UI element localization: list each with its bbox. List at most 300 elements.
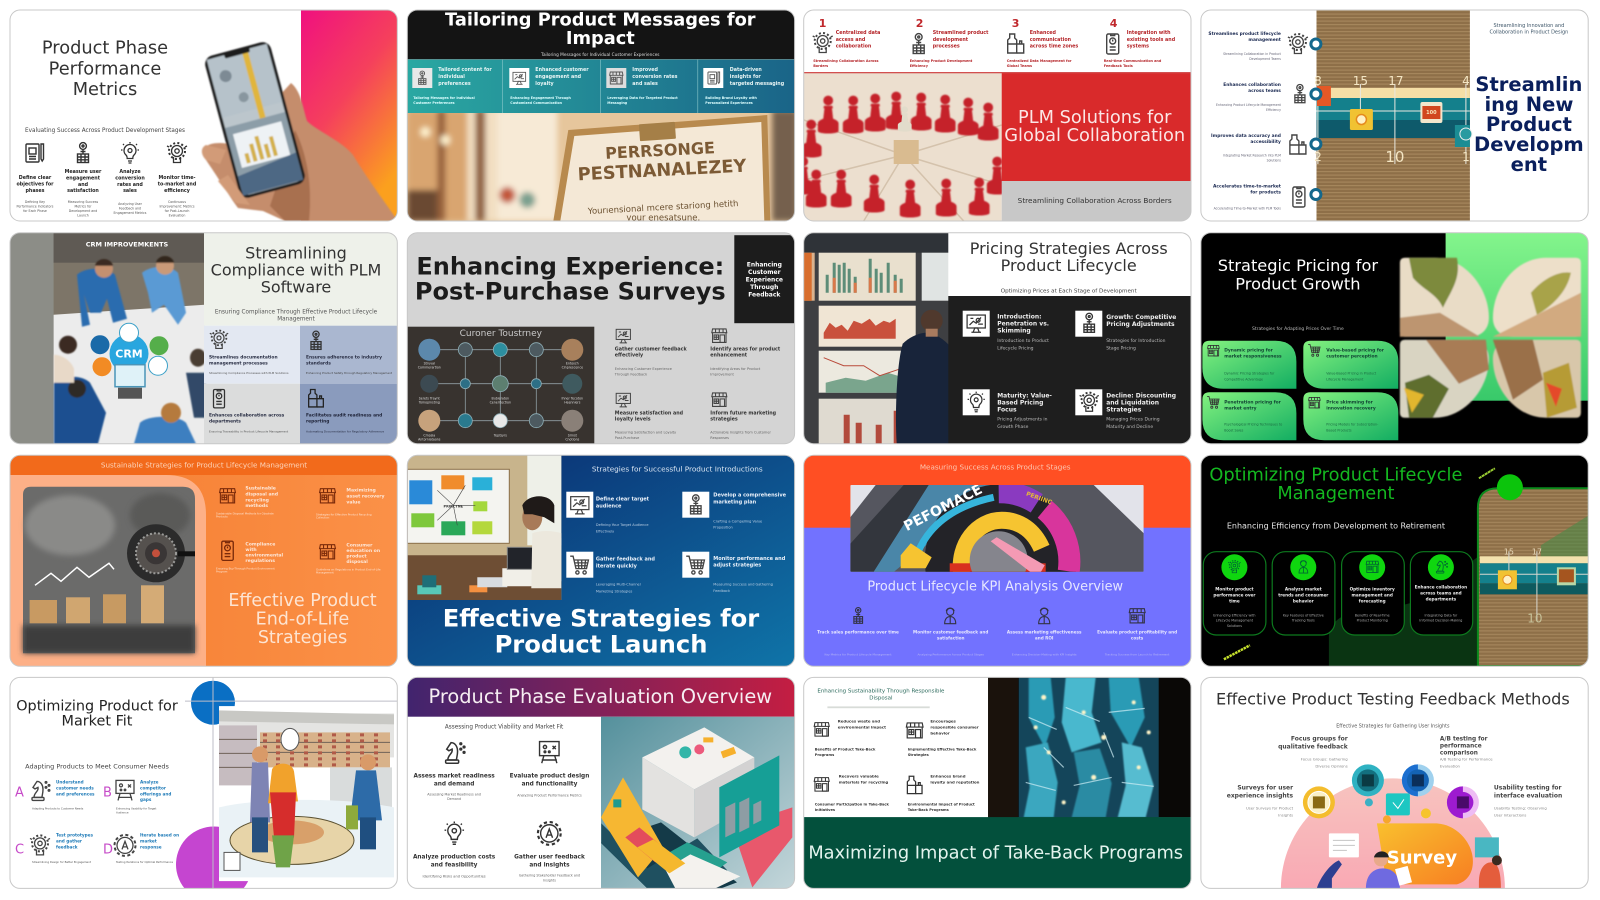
quadrant: audit readiness: reporting — [306, 419, 329, 425]
item: define objectives — [16, 144, 54, 213]
item: A/B testing: A/B testing for — [1440, 736, 1488, 742]
image: timeline panel: 10 — [1527, 611, 1543, 625]
item: marketing plan: Proposition — [713, 525, 733, 529]
item: target audience: Defining Your Target Audience — [596, 523, 648, 527]
item: enhances brand: Enhances brand — [930, 773, 966, 778]
grey subtitle panel — [1002, 181, 1192, 221]
image: hand holding phone — [202, 40, 398, 221]
image: CRM team meeting — [54, 233, 206, 444]
item: measure engagement: satisfaction — [67, 188, 99, 194]
item B: competitor offerings: gaps — [140, 797, 152, 802]
item: monitor performance — [682, 552, 786, 593]
item D: iterate: Iterate based on — [140, 832, 179, 837]
item A: customer needs: and preferences — [56, 791, 95, 796]
item: data-driven insights: Building Brand Loyalty with — [705, 96, 757, 100]
item: production costs: Analyze production costs — [413, 854, 496, 860]
diagram: customer journey image: TeplSyrs — [493, 434, 507, 438]
item: measure engagement: engagement — [66, 176, 101, 182]
item: market readiness: and demand — [434, 781, 474, 787]
item A: customer needs: Adapting Products to Customer Needs — [32, 806, 84, 810]
item: data-driven insights: Personalized Experiences — [705, 101, 753, 105]
item 2: streamlined processes: processes — [933, 44, 960, 50]
item: monitor time to market: Continuous — [168, 200, 186, 204]
heading: slide title: Streamlining — [245, 244, 347, 263]
item: maturity — [963, 389, 1052, 430]
card: monitor performance: Enhancing Efficiency with — [1213, 613, 1256, 617]
item 1: centralized data: Borders — [813, 64, 828, 68]
item A: customer needs: customer needs — [56, 785, 94, 790]
item 1: centralized data: access and — [836, 37, 866, 43]
callout: black subtitle box — [734, 235, 794, 323]
item: gather feedback — [614, 329, 688, 377]
heading: slide title: Maximizing Impact of Take-Back Programs — [808, 842, 1183, 863]
image: wooden timeline: 17 — [1388, 74, 1404, 88]
image: CRM team meeting: CRM — [115, 348, 143, 361]
heading: slide title: Management — [1277, 483, 1394, 504]
quadrant: collaboration: Enhances collaboration across — [209, 413, 285, 419]
item: monitor feedback: satisfaction — [937, 635, 965, 640]
item: accelerates time-to-market: Accelerates time-to-market — [1213, 184, 1281, 190]
diagram: customer journey image: Ceneritection — [490, 401, 511, 405]
card: penetration pricing — [1202, 392, 1296, 440]
panel: Streamlining Compliance slide — [10, 233, 398, 444]
item: measure engagement: Metrics for — [75, 204, 92, 208]
panel: Product Phase Evaluation slide — [407, 677, 796, 889]
item: inform marketing: Responses — [710, 436, 729, 440]
item: growth — [1075, 311, 1176, 352]
item: production costs — [413, 821, 496, 878]
top banner text: Measuring Success Across Product Stages — [920, 462, 1071, 471]
item: production costs: and feasibility — [431, 862, 478, 868]
top orange block — [804, 455, 1192, 528]
item: recovers materials: materials for recycling — [839, 779, 889, 784]
item: gather feedback: Marketing Strategies — [596, 589, 633, 593]
top bar — [10, 455, 398, 475]
item: market readiness — [413, 743, 495, 801]
item: consumer education — [316, 542, 381, 574]
cross lines — [185, 677, 398, 888]
item B: competitor offerings: Audience — [116, 810, 129, 814]
item: inform marketing — [710, 393, 777, 440]
item: track sales: Track sales performance over time — [817, 629, 899, 634]
subtitle: Assessing Product Viability and Market Fit — [445, 724, 564, 730]
item: measure satisfaction: Post-Purchase — [615, 436, 639, 440]
image: personalised sign in cafe: PERRSONGE — [605, 138, 715, 163]
item: user feedback: Gather user feedback — [514, 854, 585, 860]
item: define objectives: Define clear — [19, 175, 52, 181]
item: growth: Strategies for Introduction — [1106, 338, 1166, 344]
item: product design: Evaluate product design — [510, 773, 589, 779]
quadrant: documentation — [204, 326, 300, 384]
image: wooden timeline: 2 — [1314, 150, 1322, 164]
item: improved conversion: conversion rates — [632, 74, 678, 80]
item: monitor time to market — [158, 143, 197, 218]
item C: test prototypes — [15, 832, 93, 864]
item: enhances collaboration — [1216, 82, 1321, 112]
item 3: enhanced communication: 3 — [1012, 17, 1019, 30]
diagram: customer journey image: Bubieraton — [492, 397, 509, 401]
item 4: integration — [1104, 17, 1176, 68]
item: gather feedback: iterate quickly — [596, 563, 638, 569]
item: target audience: Effectively — [596, 529, 614, 533]
card: penetration pricing: Penetration pricing for — [1224, 400, 1282, 406]
item: evaluate profitability: costs — [1131, 635, 1144, 640]
callout: black subtitle box: Experience — [746, 277, 783, 284]
item: marketing plan: marketing plan — [713, 499, 757, 505]
item: encourages behaviour: Implementing Effective Take-Back — [908, 747, 977, 751]
item: asset recovery: Strategies for Effective Product Recycling — [316, 512, 372, 516]
item: A/B testing: A/B Testing for Performance — [1440, 756, 1493, 761]
item: measure satisfaction — [615, 393, 684, 440]
item 3: enhanced communication: across time zones — [1030, 44, 1078, 50]
subtitle: Strategies for Adapting Prices Over Time — [1252, 326, 1344, 332]
item: decline: Maturity and Decline — [1106, 424, 1153, 430]
item 2: streamlined processes: Streamlined product — [933, 30, 989, 36]
item: A/B testing: comparison — [1440, 750, 1478, 756]
image: wooden timeline: 10 — [1385, 148, 1404, 166]
panel: End-of-Life Strategies slide — [10, 455, 398, 666]
item: usability testing: Usability Testing: Observing — [1494, 805, 1547, 810]
card: collaboration: Integrating Data for — [1425, 613, 1458, 617]
item: usability testing: Usability testing for — [1494, 784, 1562, 791]
card: monitor performance — [1203, 552, 1266, 635]
item: tailored content: Customer Preferences — [413, 101, 455, 105]
item: growth: Stage Pricing — [1106, 346, 1136, 352]
item 2: streamlined processes — [910, 17, 989, 68]
callout: black subtitle box: Customer — [748, 269, 781, 276]
card: inventory — [1342, 552, 1404, 635]
item: reduces waste: environmental impact — [838, 724, 886, 729]
item: target audience — [566, 492, 650, 533]
item: product design: Analyzing Product Performance Metrics — [517, 793, 582, 797]
item: streamlines lifecycle: Streamlining Collaboration in Product — [1223, 52, 1282, 56]
item 4: integration: 4 — [1110, 17, 1118, 30]
card: dynamic pricing: Competitive Advantage — [1224, 378, 1263, 382]
image: man planning at whiteboard: PRIRCTNE — [444, 504, 464, 508]
red rule — [804, 72, 1192, 73]
item: analyze conversion: sales — [123, 188, 137, 194]
heading: slide title: Strategic Pricing for — [1218, 256, 1378, 275]
item: evaluate profitability — [1097, 609, 1177, 656]
item: measure satisfaction: Measure satisfaction and — [615, 411, 684, 417]
item: surveys: Surveys for user — [1237, 784, 1293, 791]
item: monitor feedback: Analyzing Performance Across Product Stages — [918, 652, 984, 656]
item: identify areas: Identifying Areas for Product — [710, 367, 761, 371]
item: market readiness: Assessing Market Readiness and — [427, 792, 481, 796]
red title panel — [1002, 73, 1192, 181]
diagram: customer journey image: Entoxch — [566, 362, 579, 366]
item A: customer needs: Understand — [56, 779, 84, 784]
card: value-based pricing: Value-Based Pricing in Product — [1326, 372, 1377, 376]
heading: slide title: Product Phase Evaluation Overview — [428, 685, 772, 708]
heading: slide title: Product Launch — [495, 630, 707, 658]
item: track sales — [817, 608, 899, 656]
item: asset recovery: Collection — [316, 515, 330, 519]
item: assess marketing: Enhancing Decision-Making with KPI Insights — [1012, 652, 1077, 656]
item: improved conversion: Leveraging Data for Targeted Product — [607, 96, 678, 100]
item: accelerates time-to-market — [1213, 184, 1321, 210]
diagram: customer journey image: Ihner Tecoton — [562, 397, 583, 401]
item: decline: Strategies — [1106, 407, 1142, 414]
heading: slide title: Pricing Strategies Across — [970, 239, 1168, 258]
subtitle: Optimizing Prices at Each Stage of Development — [1001, 289, 1137, 295]
item: accelerates time-to-market: Accelerating Time-to-Market with PLM Tools — [1214, 206, 1281, 210]
subtitle: Adapting Products to Meet Consumer Needs — [25, 762, 169, 770]
illustration: survey dome with rings — [1281, 764, 1505, 888]
illustration: survey dome with rings: Survey — [1387, 847, 1457, 868]
item: monitor performance: Monitor performance and — [713, 556, 786, 562]
item: identify areas: Identify areas for product — [710, 347, 781, 353]
item: focus groups: Diverse Opinions — [1315, 763, 1348, 768]
heading: slide title: Optimizing Product Lifecycle — [1209, 464, 1462, 485]
item: encourages behaviour: Encourages — [930, 718, 957, 723]
item: enhances brand — [907, 773, 980, 812]
item: product design: and functionality — [522, 781, 578, 787]
item: target audience: audience — [596, 503, 622, 509]
item: improves accuracy: Solutions — [1267, 158, 1281, 162]
callout: black subtitle box: Feedback — [748, 292, 781, 299]
item: maturity: Based Pricing — [997, 400, 1043, 407]
callout: black subtitle box: Through — [750, 284, 778, 291]
image: timeline panel: 17 — [1532, 547, 1542, 556]
card: market trends: trends and consumer — [1278, 592, 1329, 597]
item: inform marketing: Inform future marketing — [710, 411, 777, 417]
top banner text: Strategies for Successful Product Introductions — [592, 464, 763, 473]
item: focus groups: Focus groups for — [1291, 735, 1348, 742]
item: tailored content: individual — [438, 74, 465, 80]
item: gather feedback — [566, 552, 655, 593]
card: collaboration: across teams and — [1420, 590, 1462, 595]
item: improved conversion: Improved — [632, 67, 659, 73]
panel: Streamlining New Product Development slide — [1201, 10, 1589, 221]
callout: black subtitle box: Enhancing — [747, 262, 782, 269]
item: sustainable disposal: Products — [216, 514, 228, 518]
decorative squiggle top — [1479, 468, 1495, 478]
heading: slide title: End-of-Life — [256, 609, 349, 629]
diagram: customer journey image: Cinprescence — [562, 366, 583, 370]
subtitle: Collaboration in Product Design — [1489, 30, 1568, 36]
item: evaluate profitability: Tracking Success from Launch to Retirement — [1104, 652, 1170, 656]
subtitle: Tailoring Messages for Individual Customer Experiences — [540, 52, 660, 58]
item: analyze conversion: Analyze — [119, 169, 141, 175]
blue circle accent — [191, 681, 235, 725]
diagram: customer journey image: Srinst — [568, 434, 578, 438]
decorative squiggle bottom — [1224, 645, 1250, 659]
item: usability testing: interface evaluation — [1494, 792, 1562, 799]
item: product design — [510, 742, 589, 797]
diagram: customer journey image: Commerartion — [418, 366, 441, 370]
card: inventory: management and — [1352, 592, 1393, 597]
item 2: streamlined processes: Efficiency — [910, 64, 929, 68]
heading: slide title: Strategies — [258, 628, 347, 648]
item: define objectives: phases — [25, 188, 45, 194]
image: isometric presentation blocks — [601, 717, 796, 889]
image: CRM team meeting: CRM IMPROVEMKENTS — [86, 241, 169, 249]
quadrant: documentation: Streamlines documentation — [209, 355, 278, 361]
heading: slide title: Enhancing Experience: — [416, 253, 724, 281]
card: collaboration: Enhance collaboration — [1415, 584, 1467, 589]
item: asset recovery: value — [346, 499, 360, 505]
card: dynamic pricing: Dynamic Pricing Strategies for — [1224, 372, 1275, 376]
item: analyze conversion: conversion — [115, 176, 145, 182]
card: value-based pricing: customer perception — [1326, 354, 1378, 360]
image: timeline panel — [1478, 488, 1589, 666]
item: usability testing: User Interactions — [1494, 812, 1526, 817]
teal benefits strip — [407, 60, 795, 113]
item: compliance: regulations — [245, 558, 275, 564]
item: recovers materials: Recovers valuable — [839, 773, 879, 778]
item: streamlines lifecycle: Development Teams — [1249, 57, 1281, 61]
item: monitor performance: adjust strategies — [713, 562, 761, 568]
panel: Product Launch slide — [407, 455, 795, 666]
card: dynamic pricing — [1202, 341, 1296, 389]
subtitle: Disposal — [869, 695, 893, 701]
item: enhances brand: Environmental Impact of Product — [908, 802, 975, 806]
card: inventory: Benefits of Real-Time — [1355, 613, 1390, 617]
item 4: integration: Integration with — [1127, 30, 1171, 36]
item: compliance: environmental — [245, 552, 284, 558]
item: enhanced engagement: Customized Communication — [510, 101, 563, 105]
panel: Post-Purchase Surveys slide — [407, 233, 795, 444]
item: improved conversion: Messaging — [607, 101, 628, 105]
item: introduction: Penetration vs. — [997, 321, 1049, 328]
heading: slide title: Developm — [1474, 133, 1584, 156]
item 3: enhanced communication — [1007, 17, 1078, 68]
item: analyze conversion — [114, 142, 147, 215]
item: sustainable disposal: disposal and — [245, 491, 278, 497]
card: price skimming: Pricing Models for Subscription- — [1326, 423, 1379, 427]
item: compliance: Program — [216, 569, 228, 573]
quadrant: adherence: Enhancing Product Safety through Regulatory Management — [306, 371, 393, 375]
item: asset recovery: Maximizing — [346, 487, 376, 493]
item: focus groups: qualitative feedback — [1278, 743, 1349, 750]
gradient side band — [301, 10, 398, 221]
item D: iterate — [103, 832, 179, 864]
image: man studying charts — [804, 233, 949, 444]
quadrant: documentation: Streamlining Compliance Processes with PLM Solutions — [209, 371, 289, 375]
image: personalised sign in cafe: Yourıensional mcere stariong hetith — [587, 199, 739, 217]
panel: Market Fit slide — [10, 677, 398, 888]
image: personalised sign in cafe: PESTNANALEZEY — [577, 156, 748, 185]
green corner block — [1446, 233, 1590, 401]
card: price skimming: innovation recovery — [1326, 406, 1376, 412]
card: monitor performance: Monitor product — [1215, 586, 1254, 591]
item: tailored content: Tailoring Messages for Individual — [413, 96, 475, 100]
item 4: integration: Feedback Tools — [1104, 64, 1133, 68]
diagram: customer journey image: Struval — [424, 362, 435, 366]
divider line — [827, 706, 930, 708]
card: penetration pricing: Psychological Pricing Techniques to — [1224, 423, 1282, 427]
card: market trends: behavior — [1293, 598, 1315, 603]
item: maturity: Growth Phase — [997, 424, 1029, 430]
card: price skimming — [1303, 392, 1398, 440]
diagram: customer journey image: Curoner Toustrney — [460, 329, 543, 339]
item: monitor performance: Measuring Success and Gathering — [713, 582, 773, 586]
item 1: centralized data: collaboration — [836, 44, 872, 50]
heading: slide title: Product — [1486, 113, 1572, 136]
item: improves accuracy: Integrating Market Research into PLM — [1223, 154, 1281, 158]
item: improved conversion: and sales — [632, 81, 658, 87]
item: enhanced engagement: Enhanced customer — [535, 67, 589, 73]
item D: iterate: Testing Iterations for Optimal Performance — [115, 860, 173, 864]
peach panel — [10, 475, 206, 666]
panel: PLM Solutions slide — [793, 10, 1192, 221]
item B: competitor offerings: Enhancing Usability for Target — [116, 806, 156, 810]
panel: Product Phase Performance Metrics slide — [10, 10, 398, 221]
item: gather feedback: Leveraging Multi-Channel — [596, 582, 641, 586]
quadrant: collaboration: Ensuring Traceability in Product Lifecycle Management — [209, 430, 289, 434]
item: enhanced engagement: loyalty — [535, 81, 555, 87]
item 3: enhanced communication: Enhanced — [1030, 30, 1057, 36]
item: compliance: Ensuring Buy-Through Product Environment — [216, 566, 275, 570]
heading: slide title: PLM Solutions for — [1018, 107, 1172, 128]
item 1: centralized data — [813, 17, 880, 68]
diagram: customer journey image — [407, 327, 594, 444]
quadrant: audit readiness: Facilitates audit readiness and — [306, 413, 382, 419]
item: encourages behaviour: responsible consumer — [930, 724, 979, 729]
item: define objectives: objectives for — [16, 182, 54, 188]
purple circle accent — [176, 826, 252, 888]
subtitle: Effective Strategies for Gathering User Insights — [1336, 723, 1450, 729]
item: surveys: Insights — [1278, 812, 1293, 817]
item C: test prototypes: feedback — [56, 844, 78, 849]
image: wooden timeline: 1 — [1462, 150, 1470, 164]
item: gather feedback: effectively — [615, 353, 644, 359]
heading: slide title: Streamlin — [1475, 73, 1582, 96]
item B: competitor offerings: B — [103, 785, 112, 800]
heading: slide title: ing New — [1484, 93, 1573, 116]
item: accelerates time-to-market: for products — [1250, 190, 1281, 196]
item C: test prototypes: Streamlining Design for Better Engagement — [32, 860, 91, 864]
panel: Optimizing Product Lifecycle slide — [1201, 455, 1589, 666]
header band — [407, 677, 795, 717]
item: growth: Pricing Adjustments — [1106, 321, 1175, 328]
item: marketing plan — [682, 492, 787, 529]
card: inventory: Product Monitoring — [1357, 618, 1388, 622]
item: analyze conversion: Engagement Metrics — [114, 211, 147, 215]
item 2: streamlined processes: Enhancing Product Development — [910, 59, 973, 63]
quadrant: collaboration: departments — [209, 419, 241, 425]
item: surveys: experience insights — [1227, 792, 1294, 799]
item: track sales: Key Metrics for Product Lifecycle Management — [825, 652, 892, 656]
subtitle: Streamlining Collaboration Across Borders — [1018, 196, 1172, 205]
heading: slide title: Product Phase — [42, 38, 168, 58]
image: man planning at whiteboard — [407, 455, 561, 600]
right panel background — [204, 233, 398, 326]
image: personalised sign in cafe: your enesatsune. — [626, 214, 700, 224]
item C: test prototypes: Test prototypes — [56, 832, 93, 837]
image: wooden timeline: 4 — [1462, 74, 1470, 88]
decorative green dot — [1497, 474, 1523, 500]
card: penetration pricing: Boost Sales — [1224, 429, 1244, 433]
card: penetration pricing: market entry — [1224, 406, 1257, 412]
item C: test prototypes: and gather — [56, 838, 83, 843]
panel: Strategic Pricing slide — [1201, 233, 1590, 444]
item: enhanced engagement: Enhancing Engagement Through — [510, 96, 571, 100]
item: sustainable disposal: Sustainable Disposal Methods for Obsolete — [216, 511, 274, 515]
item: consumer education: education on — [346, 548, 380, 554]
item: measure engagement: Measuring Success — [68, 200, 99, 204]
item: data-driven insights: targeted messaging — [730, 81, 785, 87]
panel: Pricing Strategies slide — [804, 233, 1192, 444]
heading: slide title: Product Lifecycle KPI Analysis Overview — [867, 579, 1123, 594]
item: maturity: Pricing Adjustments in — [997, 417, 1048, 423]
heading: slide title: ent — [1511, 153, 1547, 176]
item: recovers materials — [814, 773, 890, 812]
heading: slide title: Product Lifecycle — [1001, 256, 1137, 275]
item B: competitor offerings: competitor — [140, 785, 167, 790]
quadrant: collaboration — [204, 384, 300, 444]
